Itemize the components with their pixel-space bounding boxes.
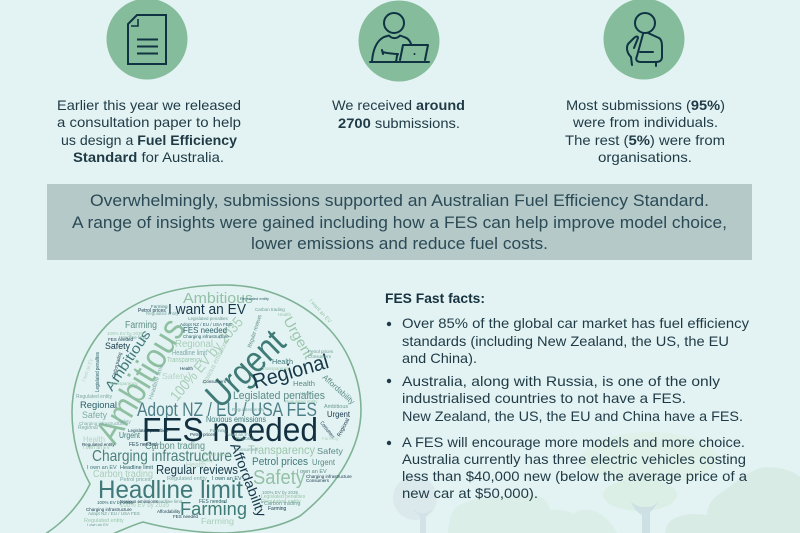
- text: submission sources: [565, 97, 725, 165]
- small words: Transparency: [110, 381, 138, 386]
- big words: Headline limit: [98, 476, 243, 504]
- medium words: Legislated penalties: [233, 390, 325, 402]
- small words: Petrol prices: [138, 308, 166, 314]
- small words: Regulated entity: [146, 311, 179, 316]
- small words: Farming: [210, 428, 227, 433]
- big words: Urgent: [197, 321, 293, 416]
- medium words: Transparency: [167, 357, 202, 364]
- small words: I own an EV: [87, 465, 117, 471]
- small words: Regulated entity: [76, 394, 113, 400]
- medium words: Noxious emissions: [202, 338, 231, 386]
- small words: Adopt NZ / EU / USA FES: [180, 322, 232, 327]
- small words: I own an EV: [212, 476, 242, 482]
- small words: I own an EV: [297, 469, 327, 475]
- medium words: Safety: [82, 410, 107, 421]
- big words: Regional: [250, 350, 331, 394]
- small words: Legislated penalties: [188, 316, 229, 321]
- small words: 100% EV by 2035: [97, 500, 134, 505]
- text: submission sources: Most submissions ( 95%): [566, 97, 725, 113]
- medium words: Safety: [162, 371, 188, 381]
- medium words: Regional: [336, 417, 351, 438]
- small words: Headline limit: [155, 499, 183, 504]
- medium words: Noxious emissions: [206, 415, 266, 424]
- background trees: [393, 432, 800, 533]
- small words: 100% EV by 2035: [262, 490, 299, 495]
- small words: Regulated entity: [240, 296, 269, 301]
- big words: Regular reviews: [156, 463, 238, 477]
- small words: I own an EV: [87, 522, 109, 527]
- small words: Headline limit: [120, 465, 153, 471]
- small words: Charging infrastructure: [306, 474, 352, 479]
- icon: document circle: [106, 0, 188, 80]
- small words: Safety: [118, 419, 132, 424]
- text: consultation paper: us design a Fuel Efficiency: [61, 132, 237, 148]
- fact: Australia and Russia: [387, 373, 743, 424]
- medium words: 100% EV by 2035: [120, 500, 169, 509]
- medium words: Health: [186, 462, 206, 469]
- small words: Transparency: [262, 366, 290, 371]
- medium words: I want an EV: [308, 298, 332, 325]
- small words: Farming: [322, 436, 339, 441]
- medium words: Health: [272, 357, 293, 366]
- medium words: Urgent: [312, 458, 336, 467]
- small words: Regulated entity: [82, 442, 115, 447]
- medium words: Legislated penalties: [95, 352, 101, 392]
- fact: global market: standards (including New Zealand, the US, the EU: [402, 333, 729, 349]
- fact: global market: Over 85% of the global car market has fuel efficiency: [402, 315, 749, 331]
- medium words: Health: [83, 435, 105, 444]
- medium words: [80, 298, 356, 526]
- small words: Adopt NZ / EU / USA FES: [88, 511, 140, 516]
- small words: Consumers: [235, 447, 259, 452]
- fact: Australia and Russia: New Zealand, the US, the EU and China have a FES.: [402, 408, 743, 424]
- big words: Farming: [180, 499, 247, 519]
- small words: Charging infrastructure: [86, 507, 132, 512]
- small words: Consumers: [203, 379, 227, 384]
- text: consultation paper: a consultation paper to help: [57, 114, 241, 130]
- text: submissions received: 2700 submissions.: [338, 115, 460, 131]
- fact: model choice: new car at $50,000).: [402, 485, 538, 501]
- big words: [87, 290, 331, 519]
- small words: 100% EV by 2035: [107, 331, 144, 336]
- big words: 100% EV by 2035: [167, 314, 247, 405]
- small words: [76, 296, 352, 527]
- small words: Carbon trading: [255, 307, 285, 312]
- big words: FES needed: [142, 411, 318, 448]
- small words: Regulated entity: [285, 399, 318, 404]
- panel: summary banner: A range of insights were gained including how a FES can help improve model choice,: [72, 213, 727, 232]
- big words: Ambitious: [183, 290, 253, 307]
- text: submission sources: The rest ( 5%) were from: [565, 132, 725, 148]
- fact: model choice: less than $40,000 new (below the average price of a: [402, 468, 747, 484]
- small words: Affordability: [157, 509, 181, 514]
- small words: FES needed: [173, 514, 199, 519]
- panel: summary banner: lower emissions and reduce fuel costs.: [251, 234, 548, 253]
- small words: Regulated entity: [261, 499, 301, 505]
- small words: Farming: [268, 506, 287, 512]
- panel: summary banner: [47, 184, 752, 260]
- medium words: Carbon trading: [145, 441, 205, 452]
- speech bubble word cloud: [42, 285, 361, 533]
- text: consultation paper: Earlier this year we released: [57, 97, 241, 113]
- medium words: Health: [293, 379, 315, 388]
- small words: Petrol prices: [190, 432, 216, 437]
- medium words: Regional: [175, 339, 213, 350]
- small words: Safety: [200, 458, 214, 463]
- medium words: Safety: [105, 341, 130, 351]
- small words: Regulated entity: [167, 476, 207, 482]
- small words: Health: [278, 312, 292, 317]
- medium words: Headline limit: [172, 350, 207, 357]
- small words: I want an EV: [225, 432, 251, 437]
- text: submission sources: organisations.: [598, 149, 692, 165]
- small words: FES needed: [108, 337, 134, 342]
- small words: FES needed: [129, 442, 157, 448]
- small words: Regulated entity: [84, 518, 124, 524]
- small words: Petrol prices: [204, 452, 230, 457]
- medium words: I own an EV: [81, 358, 95, 383]
- big words: Ambitious: [87, 311, 193, 450]
- medium words: Carbon trading: [93, 469, 153, 480]
- small words: Health: [180, 366, 194, 371]
- icon: thinking person circle: [604, 0, 684, 80]
- small words: Noxious emissions: [120, 499, 158, 504]
- fact: model choice: A FES will encourage more models and more choice.: [402, 434, 745, 450]
- medium words: Carbon trading: [111, 352, 124, 379]
- medium words: Urgent: [327, 410, 351, 419]
- big words: Charging infrastructure: [92, 448, 232, 465]
- medium words: Headline limit: [148, 364, 165, 401]
- small words: Ambitious: [324, 404, 348, 410]
- small words: Charging infrastructure: [79, 421, 125, 426]
- small words: Headline limit: [119, 335, 147, 340]
- text: consultation paper: Standard for Australia.: [73, 149, 224, 165]
- text: submissions received: We received around: [332, 97, 465, 113]
- medium words: FES needed: [183, 325, 227, 335]
- speech bubble outline: [42, 285, 361, 533]
- big words: Safety: [253, 467, 305, 489]
- text: consultation paper: [57, 97, 241, 165]
- medium words: Farming: [125, 320, 157, 331]
- small words: Charging infrastructure: [183, 334, 229, 339]
- small words: Regional: [78, 425, 98, 431]
- big words: Adopt NZ / EU / USA FES: [137, 400, 317, 421]
- medium words: Transparency: [248, 443, 315, 457]
- icon: person at laptop circle: [358, 0, 440, 82]
- medium words: Regular reviews: [247, 314, 263, 349]
- medium words: Affordability: [321, 373, 356, 406]
- fact: model choice: Australia currently has three electric vehicles costing: [402, 451, 746, 467]
- panel: summary banner: Overwhelmingly, submissions supported an Australian Fuel Efficiency Standard.: [90, 191, 709, 210]
- medium words: Safety: [317, 446, 344, 456]
- medium words: Consumers: [318, 421, 336, 440]
- medium words: Petrol prices: [252, 456, 308, 468]
- text: submission sources: were from individuals.: [572, 114, 718, 130]
- small words: Consumers: [308, 354, 332, 359]
- small words: Legislated penalties: [128, 428, 169, 433]
- small words: Regional: [236, 436, 254, 441]
- fact: Australia and Russia: Australia, along with Russia, is one of the only: [402, 373, 720, 389]
- small words: Petrol prices: [120, 477, 151, 483]
- small words: FES needed: [199, 499, 227, 505]
- fact: Australia and Russia: industrialised countries to not have a FES.: [402, 390, 686, 406]
- fact: global market: [387, 315, 749, 366]
- big words: Urgent: [280, 314, 317, 361]
- medium words: Regional: [80, 400, 117, 411]
- small words: Regulated entity: [232, 407, 265, 412]
- small words: Carbon trading: [264, 501, 300, 507]
- fact: model choice: [387, 434, 747, 501]
- big words: Affordability: [227, 441, 269, 519]
- small words: Petrol prices: [308, 349, 334, 354]
- small words: Legislated penalties: [261, 494, 306, 500]
- small words: Farming: [151, 304, 168, 309]
- small words: Health: [300, 391, 314, 396]
- fact: global market: and China).: [402, 350, 477, 366]
- heading: FES fast facts: FES Fast facts:: [385, 291, 485, 306]
- small words: I own an EV: [83, 445, 111, 451]
- small words: Consumers: [306, 478, 330, 483]
- medium words: Urgent: [119, 431, 141, 440]
- big words: Ambitious: [101, 327, 154, 394]
- big words: I want an EV: [168, 302, 246, 318]
- medium words: Farming: [201, 517, 234, 526]
- text: submissions received: [332, 97, 465, 131]
